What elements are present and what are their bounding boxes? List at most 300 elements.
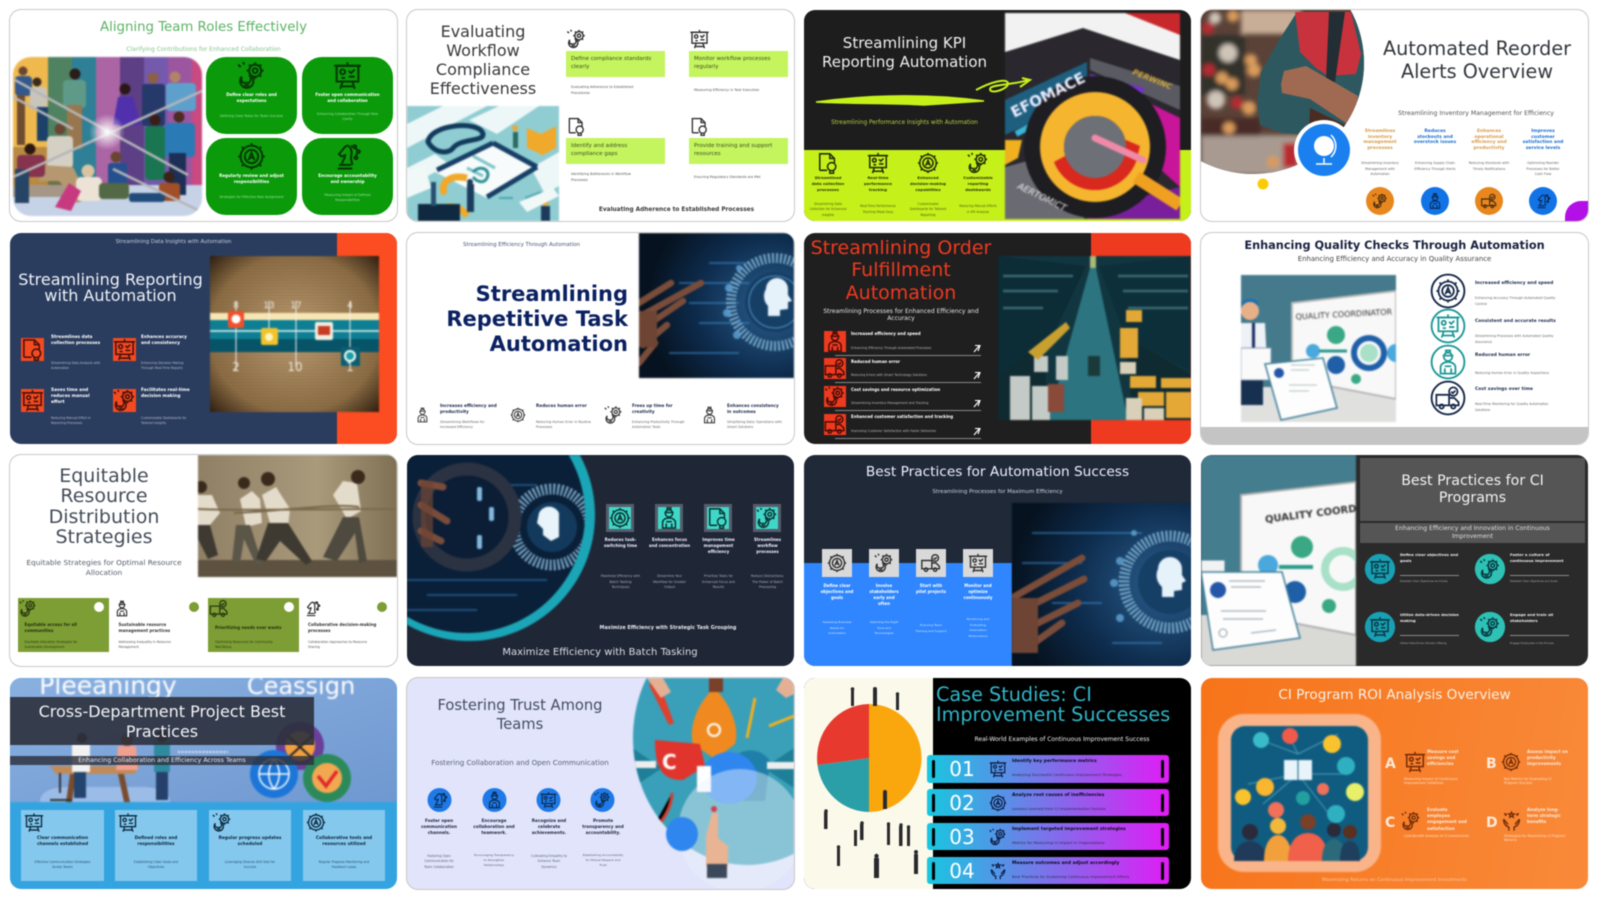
label — [910, 175, 946, 192]
blue band — [804, 563, 1012, 666]
title: CI Program ROI Analysis Overview — [1278, 687, 1511, 703]
icon: dashboard money — [690, 29, 710, 49]
footer caption: Maximizing Returns on Continuous Improvement Investments — [1322, 878, 1467, 882]
caption: Customizable — [918, 202, 938, 206]
label: pilot projects — [916, 589, 946, 594]
icon: document badge — [690, 117, 708, 137]
title: Maximize Efficiency with Batch Tasking — [502, 647, 698, 658]
step 01 — [926, 754, 1168, 782]
label: Facilitates real-time — [141, 388, 190, 393]
caption: Feedback Loops — [332, 865, 356, 869]
caption: Prioritize Tasks for — [704, 574, 733, 578]
label: benefits — [1527, 819, 1546, 824]
label box: resources — [694, 151, 721, 157]
label: Streamlined — [815, 175, 841, 180]
title: Distribution — [49, 506, 159, 528]
label — [141, 334, 187, 347]
caption: Utilize Data-Driven Decision Making — [1400, 642, 1447, 645]
gauge image: AERTOMICT — [1015, 181, 1069, 215]
panel: Streamlining Reporting with Automation — [10, 232, 397, 444]
caption — [596, 574, 645, 590]
caption: Program Success — [1504, 781, 1532, 785]
label — [226, 92, 278, 104]
panel: Best Practices for Automation Success — [804, 455, 1191, 666]
caption: Defining Clear Roles for Team Success — [220, 114, 283, 118]
icon — [701, 404, 718, 424]
label: inventory — [1368, 135, 1392, 140]
benefit: increases efficiency — [416, 402, 506, 432]
label: Enhances accuracy — [141, 334, 187, 340]
icon circle — [482, 788, 507, 812]
column: reduces stockouts — [1408, 129, 1462, 216]
status dot — [189, 602, 199, 612]
label: Utilize data-driven decision — [1400, 612, 1459, 617]
caption: Evaluating — [970, 622, 986, 626]
title — [822, 34, 987, 71]
panel: Maximize Efficiency with Batch Tasking — [407, 455, 794, 666]
caption: Reducing Stockouts with — [1469, 161, 1509, 165]
label: Reduced human error — [1475, 353, 1530, 358]
step: recognize achievements — [522, 788, 576, 872]
caption: Establish Clear Objectives and Goals — [1400, 580, 1448, 583]
icon — [818, 152, 838, 175]
icon tile — [21, 388, 44, 412]
label: Reduces human error — [536, 402, 587, 408]
caption: Improvement Initiatives — [1404, 781, 1443, 785]
label: Start with — [920, 583, 942, 588]
icon circle — [427, 788, 452, 812]
label: Define clear roles and — [226, 92, 277, 97]
panel: Fostering Trust Among Teams — [407, 678, 794, 888]
caption — [860, 204, 896, 214]
label: efficiencies — [1427, 761, 1454, 766]
caption — [954, 204, 1002, 216]
panel: Cross-Department Project Best Practices — [10, 678, 397, 888]
label — [596, 537, 645, 549]
label: processes — [308, 628, 331, 633]
label — [318, 172, 378, 185]
card: regularly review — [206, 138, 297, 215]
label: stockouts and — [1417, 135, 1453, 140]
label: management — [1363, 140, 1397, 145]
label: goals — [1400, 558, 1411, 563]
panel: Automated Reorder Alerts Overview — [1201, 10, 1588, 221]
label: objectives and — [821, 589, 853, 594]
benefit: enhances consistency — [701, 402, 791, 432]
row: cost savings — [824, 386, 984, 411]
panel: Best Practices for CI Programs — [1201, 455, 1588, 666]
icon — [1501, 810, 1522, 832]
caption: Tailored Insights — [141, 421, 166, 425]
card: prioritizing needs — [208, 598, 299, 652]
icon circle — [1475, 187, 1503, 215]
caption: Enhanced Focus and — [702, 580, 735, 584]
label: improvements — [1527, 761, 1561, 766]
panel: Evaluating Workflow Compliance Effectiveness — [407, 10, 794, 221]
label — [1510, 612, 1553, 624]
column: improves satisfaction — [1516, 129, 1570, 216]
label: scheduled — [238, 842, 262, 847]
label: Measure cost — [1427, 748, 1459, 754]
right notch — [1160, 794, 1164, 812]
caption: Strategies for Maximizing CI Program — [1504, 834, 1565, 838]
image: quality coordinator certificate: QUALITY COORDINATOR — [1295, 307, 1393, 322]
label box: compliance gaps — [571, 151, 618, 157]
photo: hand touching AI interface — [639, 232, 794, 378]
label: Engage and train all — [1510, 612, 1553, 617]
icon — [19, 599, 37, 618]
label: teamwork. — [481, 830, 507, 835]
label: Define clear — [823, 583, 851, 588]
label: capabilities — [915, 187, 941, 192]
label: processes — [756, 549, 779, 554]
icon tile — [21, 338, 44, 360]
caption: Dashboards for Tailored — [910, 207, 946, 211]
label box — [689, 138, 788, 164]
caption — [743, 574, 792, 590]
label: Equitable access for all — [24, 622, 77, 627]
caption: Needs for — [830, 626, 844, 630]
label: Implement targeted improvement strategies — [1012, 826, 1126, 832]
label box — [689, 51, 788, 77]
column: pilot projects — [908, 549, 954, 644]
caption: Through Real-Time Reports — [141, 366, 183, 370]
number: 01 — [949, 756, 975, 780]
caption: for Mutual Respect and — [586, 858, 620, 862]
label — [632, 402, 673, 415]
caption: in KPI Analysis — [967, 210, 989, 214]
caption: Processes — [536, 425, 552, 429]
caption: Output — [664, 585, 675, 589]
card: sustainable resource — [112, 598, 204, 652]
label — [1408, 129, 1462, 146]
right notch — [1160, 760, 1164, 778]
left notch — [932, 760, 935, 778]
label: Foster open — [425, 818, 453, 823]
caption: Dynamics — [541, 864, 557, 868]
caption: Analyzing Successful Continuous Improvement Strategies — [1012, 772, 1122, 776]
subtitle: Streamlining Performance Insights with Automation — [831, 120, 978, 126]
caption — [576, 852, 630, 868]
title — [407, 697, 633, 734]
subtitle: Streamlining Processes for Maximum Efficiency — [932, 489, 1063, 495]
caption: Reducing Manual Effort in — [51, 416, 91, 420]
icon circle — [536, 788, 561, 812]
icon — [118, 812, 138, 832]
title: Streamlining Reporting — [18, 270, 203, 288]
title: Teams — [497, 716, 543, 732]
caption: Processes — [571, 178, 588, 182]
caption: Communication for — [424, 859, 454, 863]
divider — [835, 410, 981, 411]
caption: Ensuring Team — [920, 623, 942, 627]
label: Streamlines data — [51, 334, 92, 340]
title: Resource — [60, 485, 148, 507]
label — [440, 402, 497, 415]
caption: Streamlining Processes with Automated Quality — [1475, 334, 1553, 338]
caption — [308, 640, 367, 649]
title — [936, 685, 1170, 725]
caption: Measuring Efficiency in Task Execution — [694, 88, 759, 92]
caption: Reducing Human Error in Routine — [536, 420, 591, 424]
title: Improvement Successes — [936, 703, 1170, 726]
status dot — [94, 602, 104, 612]
caption: Automation — [969, 628, 987, 632]
practice: engage stakeholders — [1474, 611, 1574, 647]
panel: Case Studies: CI Improvement Successes — [804, 678, 1191, 888]
row: reduced human error — [824, 358, 984, 383]
illustration: team with beams — [12, 56, 204, 217]
icon — [114, 599, 130, 618]
caption: Enhancing Supply Chain — [1415, 161, 1455, 165]
letter: C — [1385, 814, 1395, 830]
column: define objectives — [814, 549, 860, 644]
caption: Lessons Learned from CI Implementation Failures — [1012, 806, 1106, 810]
icon tile — [963, 549, 993, 577]
caption: Automation — [1370, 172, 1390, 176]
caption: Increased Efficiency — [440, 425, 473, 429]
item A: cost savings — [1385, 750, 1480, 788]
label: expectations — [237, 98, 266, 103]
caption — [1504, 776, 1551, 785]
icon — [1501, 750, 1521, 772]
label: channels. — [428, 830, 450, 835]
timeline image: 17 — [290, 300, 302, 310]
icon: scroll certificate — [568, 117, 585, 137]
caption: Real-Time Monitoring for Quality Automation — [1475, 402, 1548, 406]
caption: Optimizing Reorder — [1527, 161, 1559, 165]
label: Recognize and — [532, 818, 566, 823]
subtitle: Streamlining Inventory Management for Efficiency — [1398, 110, 1554, 117]
letter: A — [1385, 756, 1396, 772]
caption: Improving Customer Satisfaction with Faster Deliveries — [851, 429, 936, 433]
caption: Enhancing Collaboration Through Role — [317, 112, 378, 116]
label — [645, 537, 694, 549]
label: Prioritizing needs over wants — [215, 625, 281, 630]
panel: Equitable Resource Distribution Strategies — [10, 455, 397, 666]
divider — [835, 354, 981, 356]
title: Strategies — [55, 526, 153, 548]
icon circle — [1474, 553, 1506, 585]
arrow — [972, 344, 981, 352]
step: transparency — [576, 788, 630, 872]
caption — [141, 416, 187, 426]
label: and ownership — [330, 179, 365, 184]
label: overstock issues — [1414, 140, 1456, 145]
icon — [1401, 810, 1421, 832]
item: real-time tracking — [860, 152, 896, 214]
caption: Fostering Open — [427, 854, 451, 858]
subtitle banner: Enhancing Collaboration and Efficiency Across Teams — [78, 757, 246, 764]
label: and concentration — [649, 543, 690, 548]
label: Reduced human error — [851, 359, 900, 364]
item C: employee engagement — [1385, 808, 1480, 846]
icon — [988, 862, 1006, 880]
item D: long-term benefits — [1486, 808, 1581, 846]
row: customer satisfaction — [824, 414, 984, 439]
label: celebrate — [538, 824, 560, 829]
label — [955, 583, 1001, 601]
photo: hand and AI head — [1012, 503, 1191, 666]
caption — [570, 85, 634, 95]
title: Fostering Trust Among — [438, 697, 602, 714]
title — [804, 236, 998, 304]
caption: Responsibilities — [335, 198, 360, 202]
title: Fulfillment — [851, 259, 951, 281]
label: Collaborative tools and — [316, 836, 372, 840]
icon tile — [824, 414, 846, 435]
caption: Enhance Team — [538, 859, 560, 863]
label: management — [704, 543, 733, 548]
top caption: Streamlining Data Insights with Automation — [116, 239, 231, 245]
label — [694, 537, 743, 555]
subheading: Maximize Efficiency with Strategic Task Grouping — [600, 625, 736, 631]
card: collaborative tools — [303, 810, 385, 880]
subtitle — [804, 308, 998, 323]
benefit: frees up time — [604, 402, 694, 432]
progress line — [1510, 634, 1569, 636]
caption: Returns — [1504, 838, 1517, 842]
caption: Efficiency Through Alerts — [1414, 167, 1456, 171]
label: Promote — [593, 818, 613, 823]
caption: Engage Employees in the Process — [1510, 642, 1554, 645]
caption: Reduce Distractions: — [751, 574, 784, 578]
caption — [645, 574, 694, 590]
caption: Enhancing Decision Making — [141, 360, 184, 364]
caption — [21, 860, 104, 870]
caption: Sharing — [308, 645, 320, 649]
label — [1353, 129, 1407, 152]
column: enhances operations — [1462, 129, 1516, 216]
column: involve stakeholders — [861, 549, 907, 644]
label: Foster open communication — [315, 92, 380, 97]
status dot — [377, 602, 387, 612]
icon tile — [824, 386, 846, 407]
caption: Customizable Dashboards for — [141, 416, 187, 420]
icon — [988, 828, 1006, 846]
progress line — [1400, 634, 1459, 636]
label: Define clear objectives and — [1400, 552, 1458, 557]
progress line — [1510, 574, 1569, 576]
caption — [861, 620, 907, 636]
step: open communication — [412, 788, 466, 872]
left notch — [932, 862, 935, 880]
label: Encourage accountability — [318, 173, 377, 178]
timeline image: 10 — [287, 360, 303, 374]
subtitle box — [1360, 523, 1585, 543]
icon ring — [1430, 308, 1466, 344]
label: satisfaction and — [1523, 140, 1563, 145]
label: continuous improvement — [1510, 558, 1564, 563]
label: Customizable — [963, 175, 993, 180]
card: collaborative decisions — [302, 598, 393, 652]
step: focus — [645, 504, 694, 594]
label: Saves time and — [51, 388, 88, 393]
letter: D — [1486, 814, 1498, 830]
label — [522, 818, 576, 837]
label: Foster a culture of — [1510, 552, 1550, 557]
icon: presentation board — [334, 62, 362, 90]
card: progress updates — [209, 810, 291, 880]
caption — [303, 860, 385, 870]
label: tracking — [869, 187, 887, 192]
title box: Best Practices for CI — [1401, 472, 1544, 488]
label: efficiency and — [1471, 140, 1507, 145]
label: Consistent and accurate results — [1475, 319, 1556, 324]
title — [1377, 36, 1577, 82]
label: Enhances consistency — [727, 402, 779, 408]
icon — [306, 812, 326, 832]
caption: Metrics for Measuring CI Impact in Organizations — [1012, 840, 1105, 844]
label: Streamlines — [1365, 129, 1395, 134]
title: Alerts Overview — [1401, 60, 1553, 82]
icon — [24, 812, 44, 832]
feature: reduced human error — [1430, 344, 1580, 380]
label — [51, 334, 100, 347]
caption: Batch Tasking — [610, 580, 631, 584]
caption — [1516, 161, 1570, 178]
divider — [835, 438, 981, 439]
caption — [955, 617, 1001, 639]
caption: Regular Progress Monitoring and — [319, 860, 369, 864]
caption: Sustainable Development — [24, 645, 64, 649]
caption: Streamlining Workflows for — [440, 420, 484, 424]
label: Streamlines — [754, 537, 781, 542]
title — [10, 272, 211, 304]
label: Improves — [1531, 129, 1555, 134]
subtitle: Real-World Examples of Continuous Improvement Success — [975, 736, 1149, 742]
caption: Automation Tools — [632, 425, 660, 429]
caption: Streamlining Inventory — [1361, 161, 1399, 165]
caption: Automation — [51, 366, 69, 370]
icon circle — [1529, 187, 1557, 215]
label box: Define compliance standards — [571, 56, 651, 62]
icon tile — [824, 330, 846, 352]
label: effort — [51, 400, 65, 405]
label — [1527, 748, 1568, 768]
icon — [209, 599, 229, 618]
step 02 — [926, 788, 1168, 816]
label: productivity — [1474, 146, 1504, 151]
caption — [536, 420, 591, 431]
subtitle box: Improvement — [1452, 533, 1493, 540]
label: Collaborative decision-making — [308, 622, 376, 627]
title: Aligning Team Roles Effectively — [100, 20, 307, 35]
label: employee — [1427, 813, 1450, 818]
card: foster open communication — [302, 57, 393, 134]
label: Enhances — [1477, 129, 1501, 134]
caption — [1475, 332, 1553, 346]
item: identify compliance gaps — [565, 117, 666, 182]
caption: Smart Solutions — [727, 425, 753, 429]
caption: Reporting Processes — [51, 421, 82, 425]
caption — [1404, 776, 1458, 785]
label: collaboration and — [473, 824, 515, 829]
caption: Encouraging Transparency — [474, 852, 514, 856]
label: term strategic — [1527, 813, 1561, 818]
title: Automation — [490, 332, 628, 356]
label — [814, 583, 860, 601]
label — [141, 388, 190, 400]
arrow — [972, 399, 981, 408]
arrow — [972, 371, 981, 380]
caption — [1353, 161, 1407, 178]
number: 02 — [949, 790, 975, 814]
caption: Processes for Better — [1526, 167, 1560, 171]
caption: The Power of Batch — [752, 580, 783, 584]
icon — [604, 404, 623, 424]
title banner — [10, 696, 314, 744]
